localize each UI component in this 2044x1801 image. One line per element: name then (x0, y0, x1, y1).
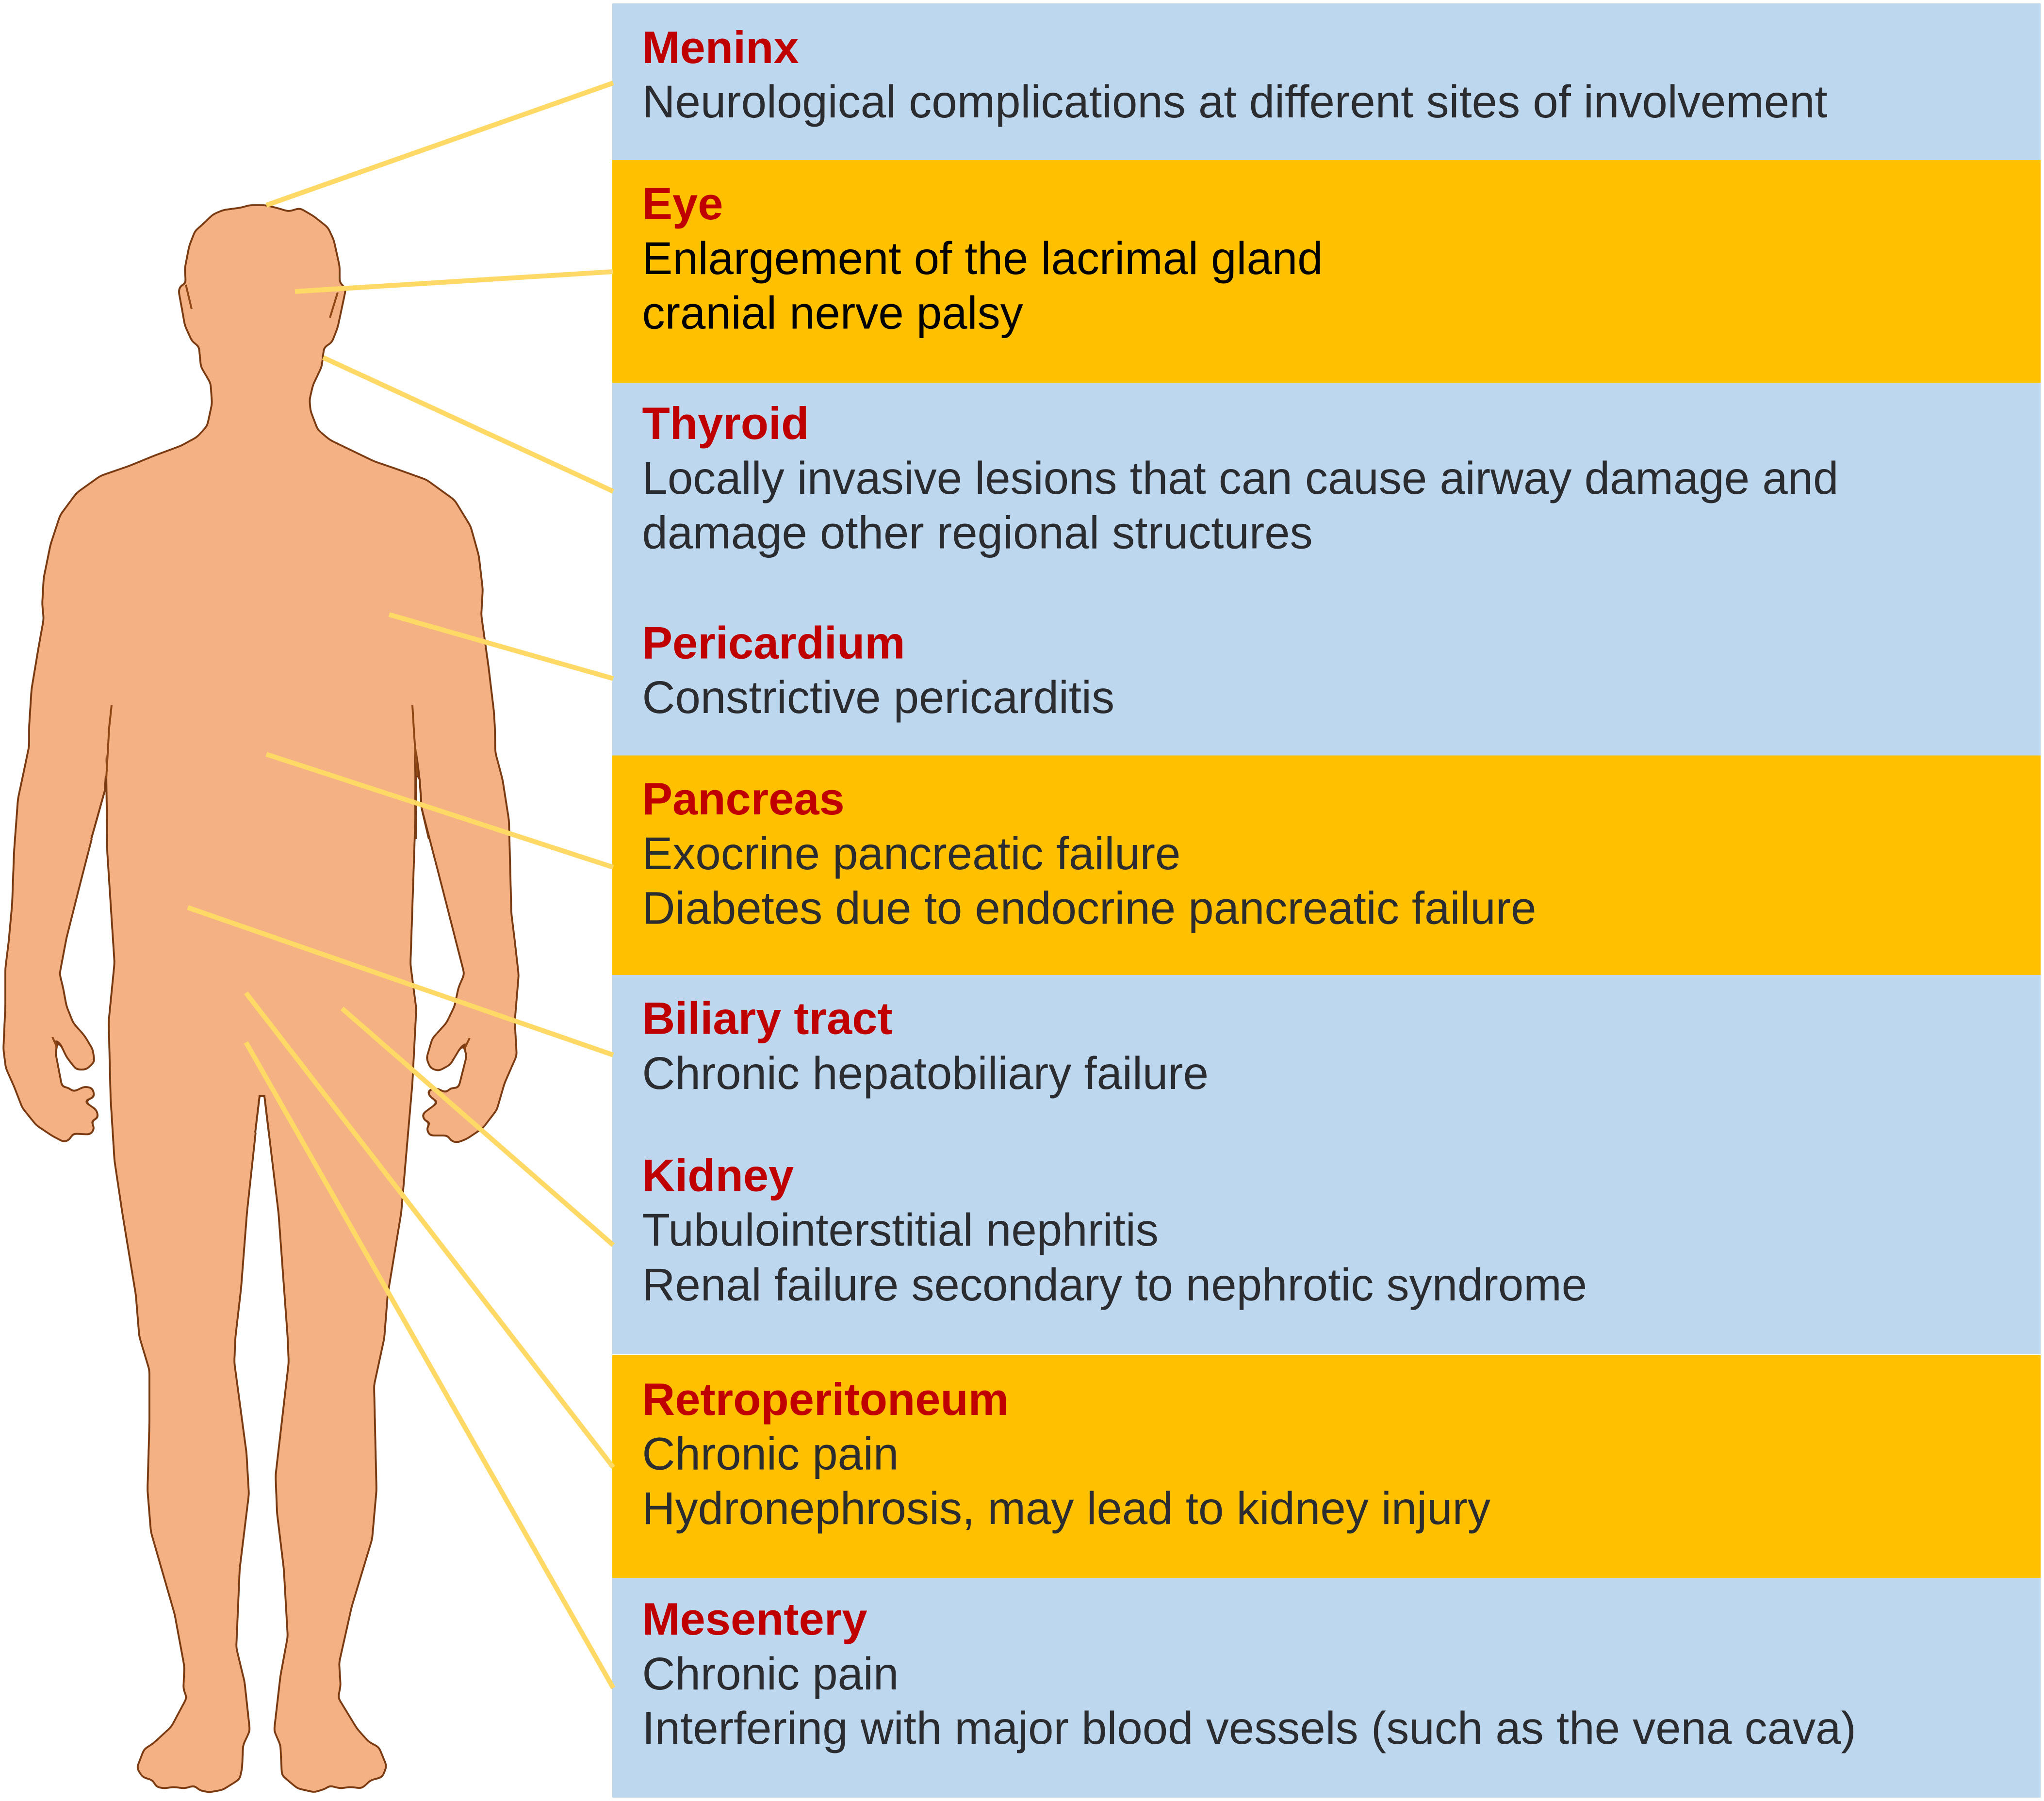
heading: meninx: Meninx (642, 22, 799, 73)
text: mesentery: Chronic pain (642, 1648, 899, 1699)
heading: pancreas: Pancreas (642, 773, 845, 824)
text: mesentery: Interfering with major blood vessels (such as the vena cava) (642, 1703, 1856, 1753)
text: pancreas: Exocrine pancreatic failure (642, 828, 1180, 879)
heading: eye: Eye (642, 178, 723, 229)
heading: retroperitoneum: Retroperitoneum (642, 1374, 1009, 1425)
leader: pancreas (266, 754, 613, 867)
panel: thyroid and pericardium (612, 383, 2041, 756)
panel: pancreas (612, 756, 2041, 975)
text: thyroid: damage other regional structures (642, 507, 1313, 558)
leader: eye (295, 272, 613, 292)
text: retroperitoneum: Hydronephrosis, may lead to kidney injury (642, 1483, 1490, 1534)
heading: biliary tract: Biliary tract (642, 992, 893, 1044)
leader lines (188, 83, 613, 1688)
text: thyroid: Locally invasive lesions that can cause airway damage and (642, 453, 1838, 503)
text: eye: Enlargement of the lacrimal gland (642, 233, 1323, 284)
panel: retroperitoneum (612, 1355, 2041, 1578)
leader: mesentery (246, 1042, 613, 1688)
body silhouette (3, 205, 519, 1792)
leader: pericardium (389, 615, 613, 679)
heading: kidney: Kidney (642, 1150, 794, 1201)
text: pericardium: Constrictive pericarditis (642, 672, 1114, 723)
text: biliary tract: Chronic hepatobiliary failure (642, 1048, 1209, 1099)
heading: pericardium: Pericardium (642, 617, 905, 668)
panel: meninx (612, 3, 2041, 160)
panel: biliary tract and kidney (612, 975, 2041, 1354)
leader: kidney (342, 1008, 613, 1245)
leader: retroperitoneum (246, 993, 613, 1467)
leader: biliary tract (188, 908, 613, 1055)
panel: eye (612, 160, 2041, 383)
panel: mesentery (612, 1578, 2041, 1798)
text: eye: cranial nerve palsy (642, 287, 1023, 339)
leader: thyroid (323, 357, 613, 491)
heading: mesentery: Mesentery (642, 1593, 867, 1644)
text: retroperitoneum: Chronic pain (642, 1428, 899, 1479)
text: pancreas: Diabetes due to endocrine pancreatic failure (642, 883, 1537, 933)
leader: meninx (266, 83, 613, 205)
text: meninx: Neurological complications at different sites of involvement (642, 76, 1828, 127)
text: kidney: Renal failure secondary to nephrotic syndrome (642, 1259, 1587, 1310)
heading: thyroid: Thyroid (642, 398, 809, 449)
text: kidney: Tubulointerstitial nephritis (642, 1204, 1159, 1255)
